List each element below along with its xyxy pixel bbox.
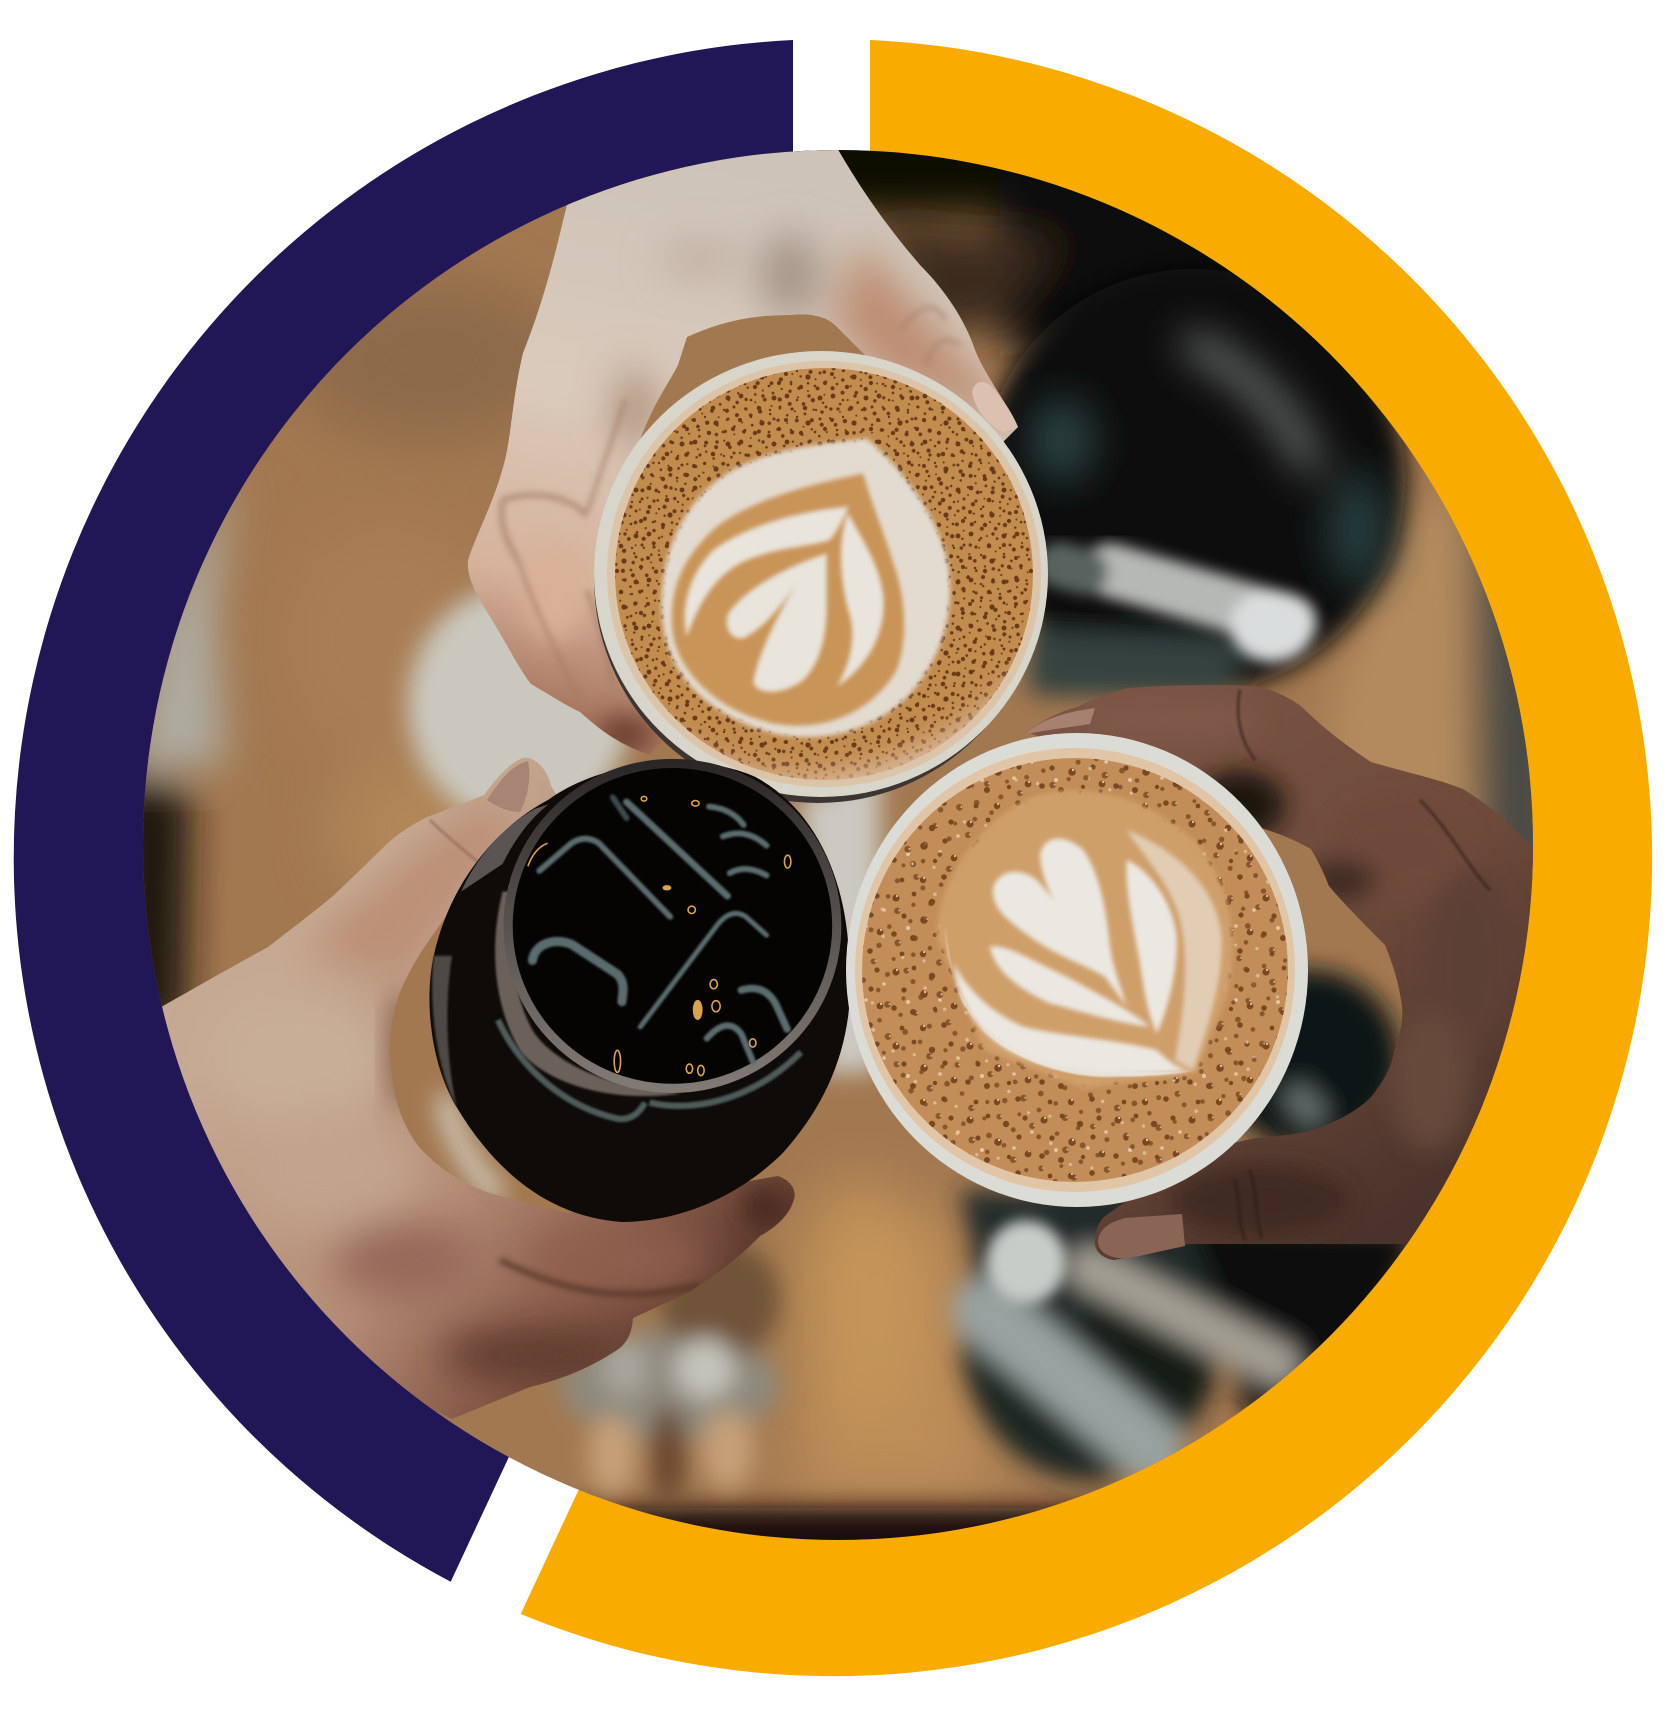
latte art: heart rosetta — [937, 790, 1233, 1088]
thumbnail on right hand — [1098, 1214, 1185, 1258]
iced coffee glass — [429, 762, 850, 1222]
ring segment: amber arc on the right — [521, 40, 1652, 1676]
latte cup: top, rosetta leaf art — [594, 351, 1050, 803]
ring segment: navy arc on the left — [14, 40, 838, 1582]
white gap behind top of the photo — [793, 40, 870, 155]
photo background: blurred table and plates — [110, 110, 1570, 1568]
glass rim — [508, 763, 837, 1088]
circular photo: three hands toasting coffee — [100, 110, 1570, 1568]
hand: lower-left hand holding the iced glass — [100, 758, 795, 1419]
ice cubes outlines — [532, 797, 787, 1061]
golden specks in the coffee — [528, 796, 791, 1076]
fingernail on top hand — [972, 382, 1018, 432]
thumbnail on left hand — [487, 761, 529, 812]
latte cup: lower right, tulip heart art — [846, 733, 1308, 1207]
hand: right dark hand holding a latte — [1027, 685, 1560, 1260]
latte art: leaf pattern — [662, 438, 950, 737]
glass wall highlights — [432, 804, 801, 1119]
hand: top pale hand holding a latte — [468, 130, 1040, 755]
